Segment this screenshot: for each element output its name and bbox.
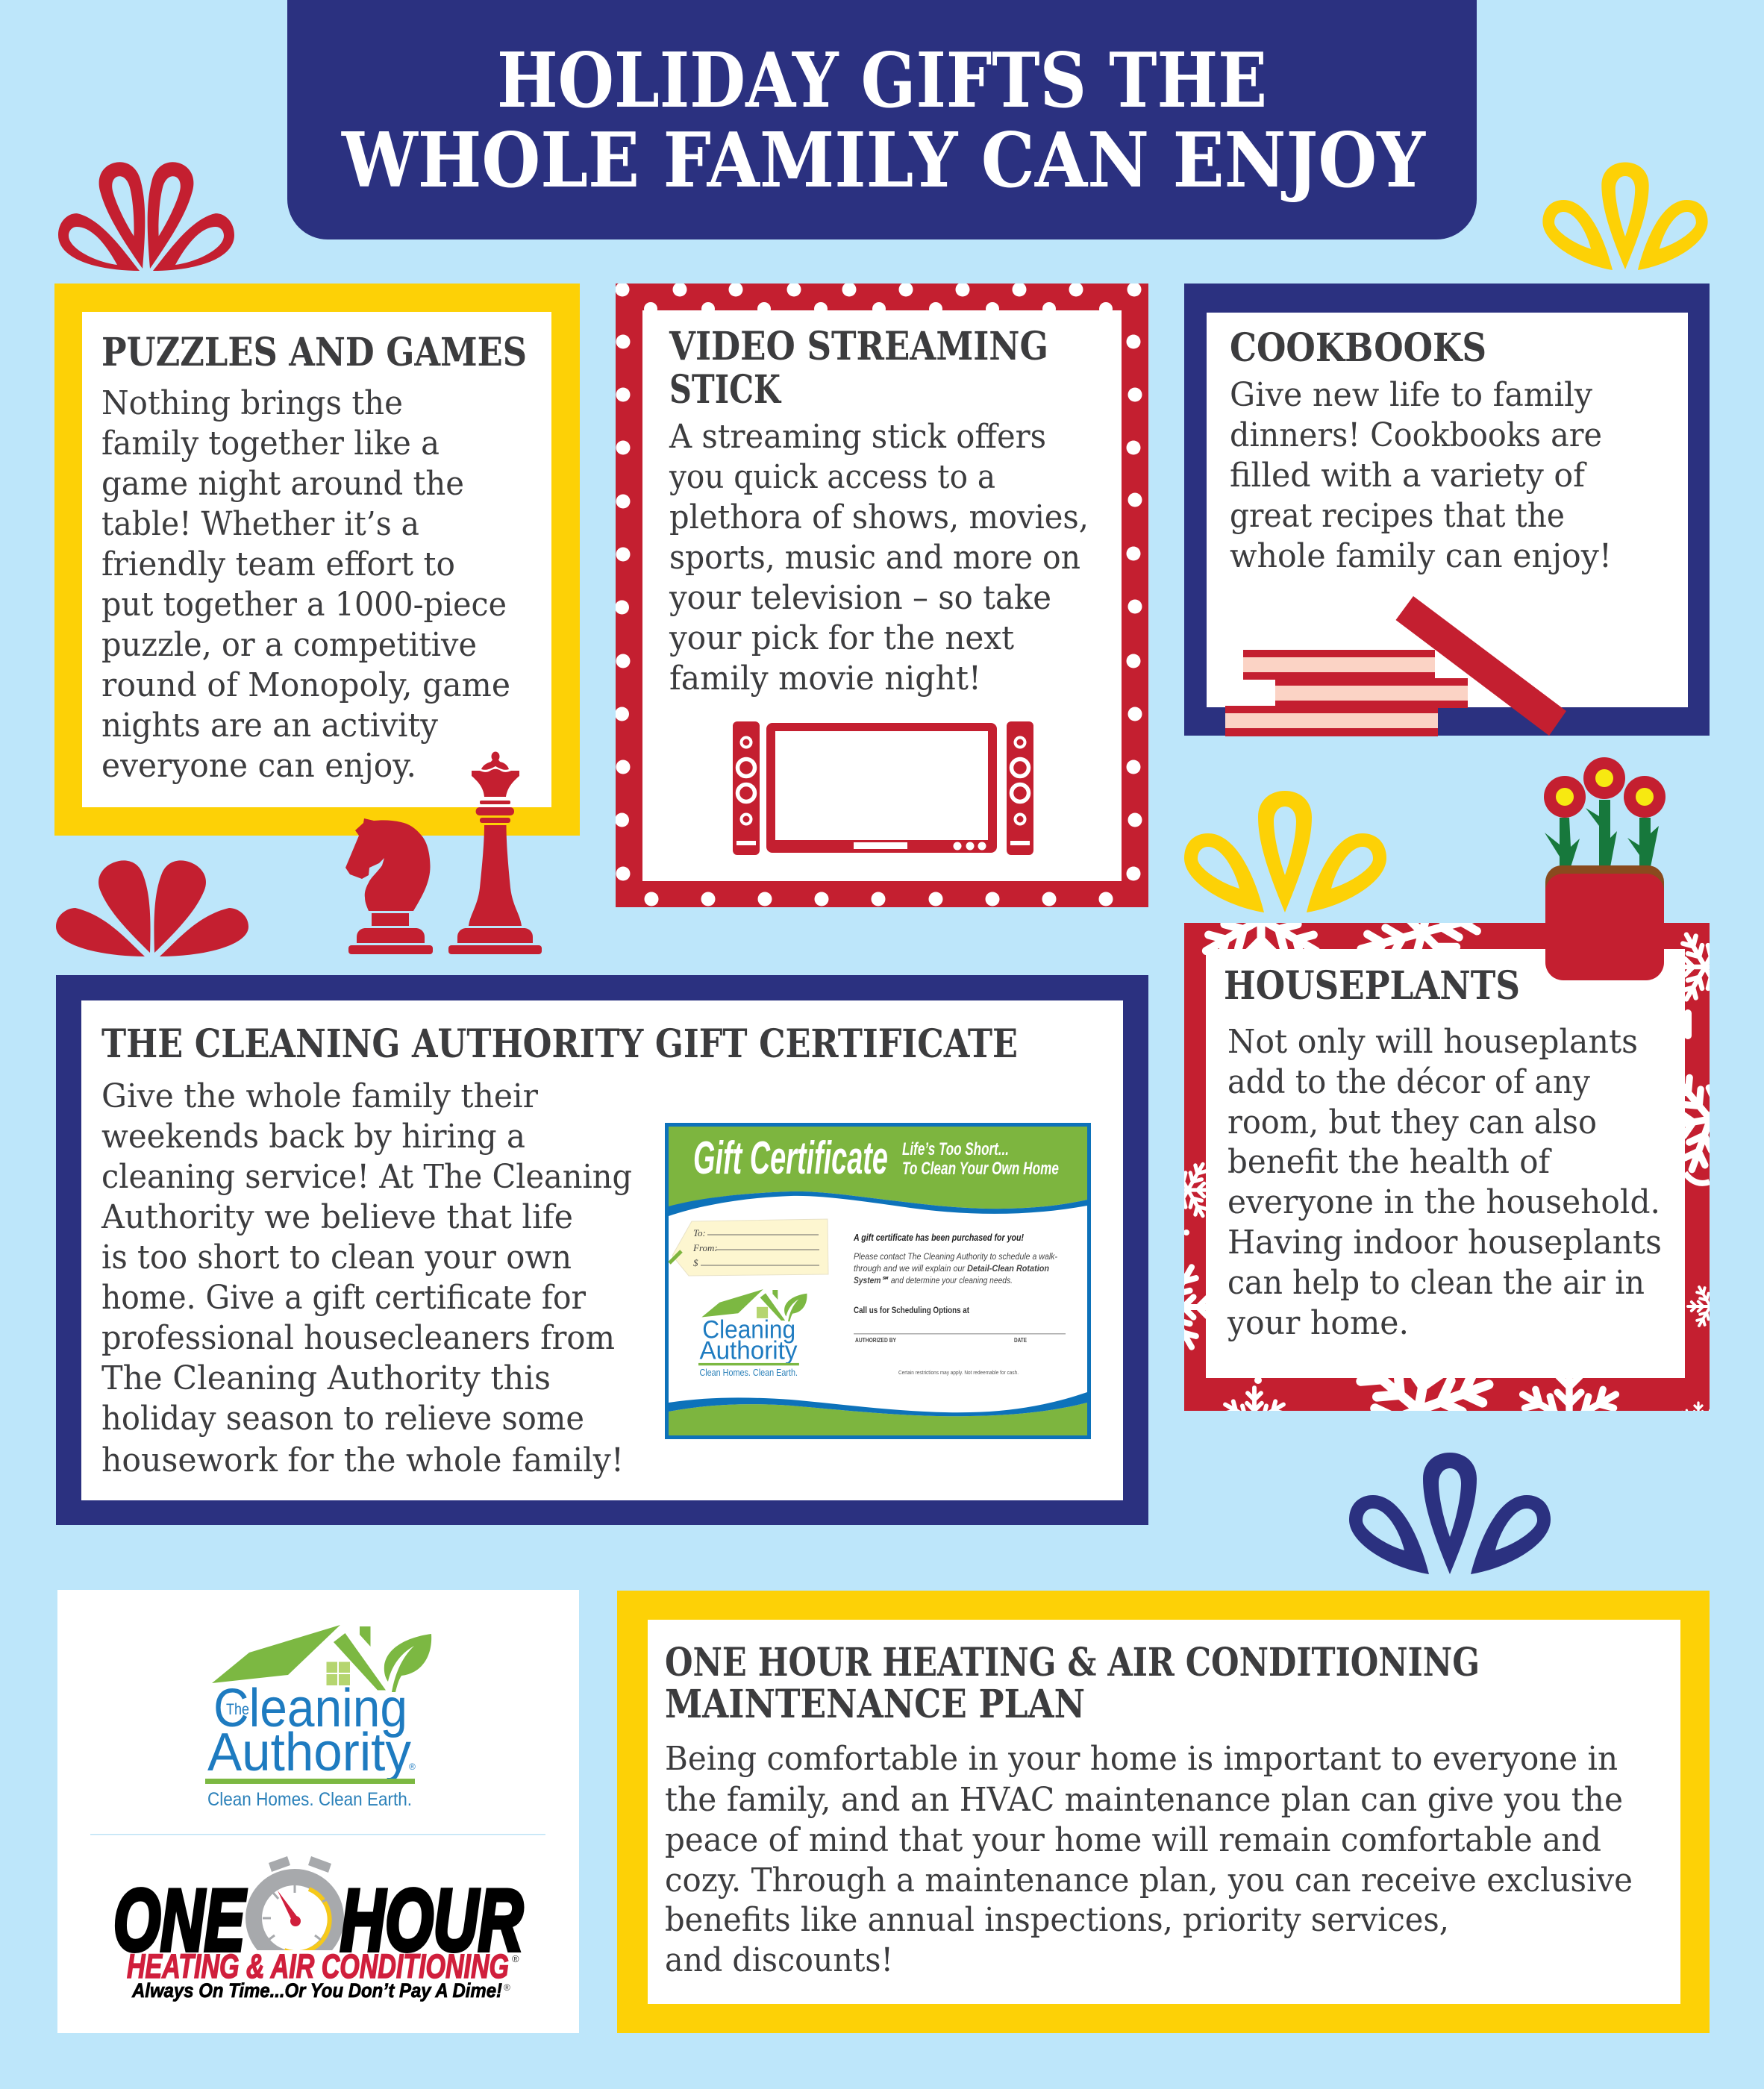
text block: houseplants: benefit the health of	[1227, 1143, 1552, 1181]
gift certificate image: To Clean Your Own Home	[902, 1159, 1059, 1179]
text block: puzzles and games: Nothing brings the	[101, 384, 403, 422]
text block: puzzles and games: put together a 1000-piece	[101, 586, 507, 624]
text block: the cleaning authority gift certificate: is too short to clean your own	[101, 1238, 572, 1277]
panel: video streaming stick	[615, 282, 1148, 907]
text block: puzzles and games: puzzle, or a competitive	[101, 626, 477, 664]
logo: one hour heating and air conditioning: ®	[504, 1982, 510, 1993]
heading: puzzles and games: PUZZLES AND GAMES	[101, 330, 527, 375]
text block: houseplants: Not only will houseplants	[1227, 1023, 1638, 1061]
logo: the cleaning authority: The	[226, 1701, 249, 1718]
text block: cookbooks: dinners! Cookbooks are	[1230, 416, 1602, 454]
heading: cookbooks: COOKBOOKS	[1230, 325, 1486, 371]
text block: video streaming stick: you quick access to a	[669, 458, 995, 496]
text block: one hour maintenance plan	[665, 1740, 1633, 1979]
text block: cookbooks: great recipes that the	[1230, 497, 1565, 535]
text block: cookbooks: filled with a variety of	[1230, 457, 1587, 495]
text block: the cleaning authority gift certificate: professional housecleaners from	[101, 1319, 615, 1357]
text block: houseplants	[1227, 1023, 1662, 1342]
icon: navy outline bow	[1349, 1453, 1551, 1574]
gift certificate image: System℠ and determine your cleaning needs.	[854, 1275, 1013, 1285]
gift certificate image: To:	[693, 1227, 706, 1238]
logo: the cleaning authority: Authority	[207, 1723, 411, 1782]
text block: houseplants: add to the décor of any	[1227, 1063, 1590, 1101]
icon: chess knight	[345, 818, 433, 954]
gift certificate image: DATE	[1014, 1337, 1028, 1344]
gift certificate image: $	[693, 1257, 698, 1268]
heading: one hour maintenance plan: ONE HOUR HEATING & AIR CONDITIONING	[665, 1640, 1480, 1685]
text block: one hour maintenance plan: peace of mind that your home will remain comfortable and	[665, 1821, 1601, 1859]
gift certificate image: Clean Homes. Clean Earth.	[699, 1368, 798, 1378]
text block: puzzles and games: friendly team effort to	[101, 545, 455, 583]
gift certificate image: From:	[692, 1242, 718, 1253]
panel: the cleaning authority gift certificate	[56, 975, 1148, 1525]
logo: the cleaning authority: Cleaning	[213, 1679, 407, 1738]
text block: the cleaning authority gift certificate: cleaning service! At The Cleaning	[101, 1158, 632, 1196]
panel: company logos	[57, 1590, 579, 2033]
text block: one hour maintenance plan: Being comfortable in your home is important to everyone in	[665, 1740, 1618, 1778]
text block: the cleaning authority gift certificate	[101, 1077, 632, 1479]
text block: the cleaning authority gift certificate: Authority we believe that life	[101, 1198, 573, 1236]
logo: one hour heating and air conditioning: Always On Time...Or You Don’t Pay A Dime!	[131, 1979, 502, 2002]
panel: puzzles and games	[54, 284, 580, 836]
text block: video streaming stick	[669, 418, 1089, 698]
text block: cookbooks	[1230, 376, 1612, 575]
text block: houseplants: room, but they can also	[1227, 1103, 1597, 1141]
gift certificate image: A gift certificate has been purchased for you!	[853, 1232, 1025, 1243]
heading: one hour maintenance plan: MAINTENANCE PLAN	[665, 1682, 1085, 1727]
text block: the cleaning authority gift certificate: holiday season to relieve some	[101, 1400, 584, 1438]
text block: puzzles and games: family together like a	[101, 425, 440, 463]
gift certificate image: AUTHORIZED BY	[855, 1337, 897, 1344]
text block: cookbooks: whole family can enjoy!	[1230, 537, 1612, 575]
gift certificate image: Authority	[699, 1337, 798, 1365]
text block: video streaming stick: family movie night!	[669, 660, 981, 698]
logo: one hour heating and air conditioning: ®	[512, 1953, 519, 1964]
text block: one hour maintenance plan: and discounts!	[665, 1941, 893, 1979]
text block: houseplants: Having indoor houseplants	[1227, 1224, 1662, 1262]
heading: one hour maintenance plan	[665, 1640, 1480, 1727]
panel: houseplants	[1184, 923, 1710, 1411]
gift certificate image: Gift Certificate	[693, 1133, 888, 1184]
logo: one hour heating and air conditioning: HOUR	[340, 1871, 523, 1969]
panel: cookbooks	[1184, 284, 1710, 736]
text block: one hour maintenance plan: cozy. Through a maintenance plan, you can receive exclusive	[665, 1861, 1633, 1899]
gift certificate image	[665, 1123, 1091, 1439]
text block: puzzles and games: nights are an activity	[101, 707, 438, 745]
gift certificate image: Life’s Too Short...	[902, 1139, 1009, 1159]
logo: the cleaning authority: Clean Homes. Clean Earth.	[207, 1789, 412, 1810]
icon: stack of books	[1225, 596, 1566, 736]
heading: video streaming stick	[669, 324, 1048, 413]
gift certificate image: through and we will explain our Detail-Clean Rotation	[854, 1263, 1049, 1274]
heading: video streaming stick: STICK	[669, 367, 781, 413]
text block: puzzles and games: round of Monopoly, game	[101, 666, 510, 704]
logo: one hour heating and air conditioning	[113, 1856, 523, 2002]
text block: houseplants: everyone in the household.	[1227, 1183, 1660, 1221]
text block: houseplants: can help to clean the air in	[1227, 1264, 1645, 1302]
text block: one hour maintenance plan: benefits like annual inspections, priority services,	[665, 1901, 1449, 1939]
gift certificate image: Cleaning	[702, 1315, 795, 1344]
icon: television with speakers	[733, 721, 1033, 855]
text block: video streaming stick: sports, music and more on	[669, 539, 1080, 577]
title banner	[287, 0, 1477, 239]
heading: the cleaning authority gift certificate: THE CLEANING AUTHORITY GIFT CERTIFICATE	[101, 1021, 1018, 1067]
text block: puzzles and games: everyone can enjoy.	[101, 747, 416, 785]
text block: the cleaning authority gift certificate: weekends back by hiring a	[101, 1118, 525, 1156]
gift certificate image: Certain restrictions may apply. Not redeemable for cash.	[898, 1371, 1019, 1376]
logo: the cleaning authority: ®	[409, 1761, 416, 1772]
text block: video streaming stick: plethora of shows, movies,	[669, 498, 1089, 536]
panel: one hour heating and air conditioning maintenance plan	[617, 1591, 1710, 2033]
text block: the cleaning authority gift certificate: housework for the whole family!	[101, 1441, 624, 1479]
text block: video streaming stick: your pick for the next	[669, 619, 1014, 657]
text block: puzzles and games: game night around the	[101, 465, 464, 503]
text block: the cleaning authority gift certificate: The Cleaning Authority this	[101, 1359, 551, 1397]
logo: one hour heating and air conditioning: ONE	[113, 1871, 246, 1969]
text block: video streaming stick: your television – so take	[669, 579, 1051, 617]
title banner: WHOLE FAMILY CAN ENJOY	[341, 116, 1427, 204]
logo: the cleaning authority	[205, 1625, 431, 1810]
icon: yellow outline bow middle	[1184, 791, 1386, 912]
logo: one hour heating and air conditioning: HEATING & AIR CONDITIONING	[127, 1947, 509, 1985]
gift certificate image: Call us for Scheduling Options at	[854, 1305, 969, 1315]
gift certificate image: Please contact The Cleaning Authority to schedule a walk-	[854, 1251, 1057, 1262]
text block: houseplants: your home.	[1227, 1304, 1409, 1342]
icon: yellow outline bow top right	[1542, 163, 1708, 270]
icon: red filled bow	[56, 854, 248, 961]
icon: red outline bow top left	[58, 157, 234, 274]
text block: one hour maintenance plan: the family, and an HVAC maintenance plan can give you the	[665, 1781, 1623, 1819]
text block: puzzles and games	[101, 384, 510, 785]
title banner: HOLIDAY GIFTS THE	[497, 36, 1267, 125]
text block: the cleaning authority gift certificate: home. Give a gift certificate for	[101, 1279, 587, 1317]
heading: video streaming stick: VIDEO STREAMING	[669, 324, 1048, 369]
heading: houseplants: HOUSEPLANTS	[1224, 963, 1520, 1009]
text block: video streaming stick: A streaming stick offers	[669, 418, 1046, 456]
text block: cookbooks: Give new life to family	[1230, 376, 1592, 414]
icon: potted flowers	[1544, 757, 1666, 980]
text block: puzzles and games: table! Whether it’s a	[101, 505, 419, 543]
text block: the cleaning authority gift certificate: Give the whole family their	[101, 1077, 539, 1115]
icon: chess queen	[448, 752, 542, 954]
